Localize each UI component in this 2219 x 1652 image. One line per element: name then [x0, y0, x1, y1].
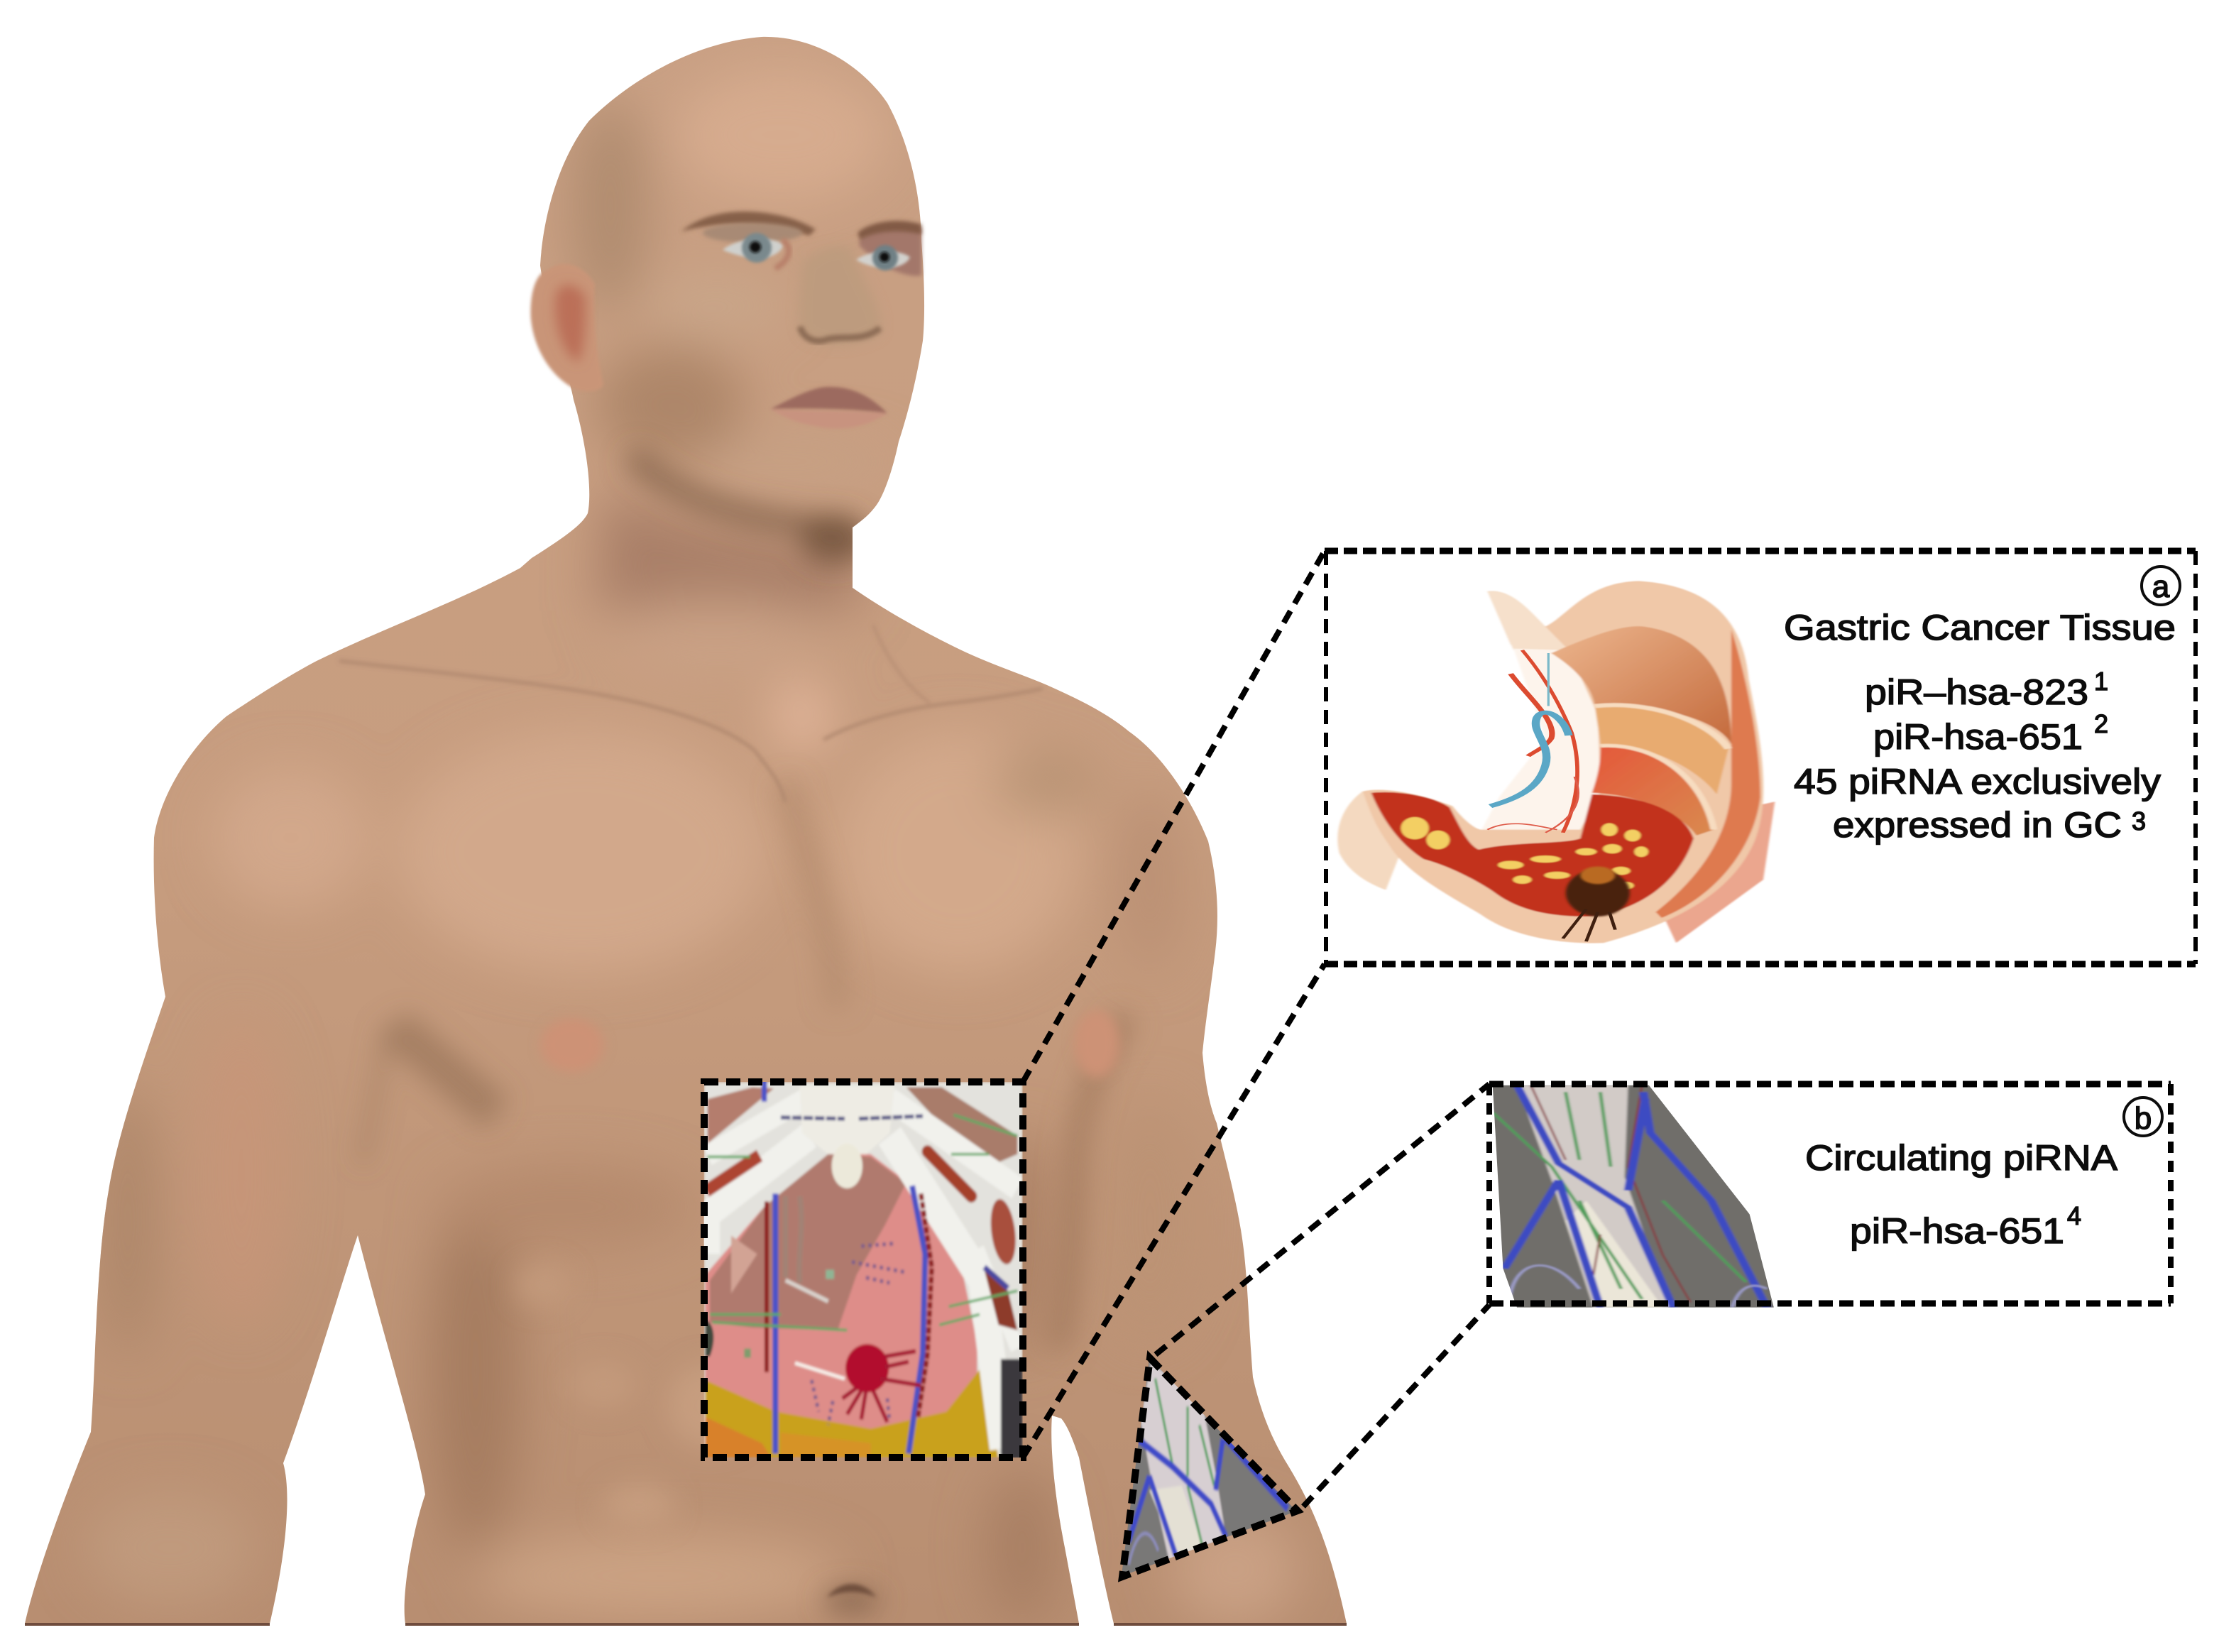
- panel a list: piR-hsa-651: [1873, 717, 2083, 757]
- left brow and eye: [681, 212, 816, 268]
- stomach illustration: [1337, 581, 1775, 943]
- stomach tumour: [1563, 866, 1630, 941]
- panel a: gastric cancer tissue: [1325, 551, 2196, 964]
- panel a list: piR–hsa-823: [1865, 672, 2088, 712]
- panel a list: 3: [2132, 806, 2146, 836]
- tumour: [843, 1344, 921, 1422]
- nipple: right: [1074, 1010, 1119, 1078]
- ear: [531, 264, 603, 391]
- panel b list: 4: [2067, 1201, 2081, 1230]
- connector lines: forearm inset to panel b: [1156, 1084, 1489, 1506]
- panel b list: piR-hsa-651: [1850, 1211, 2064, 1251]
- human torso and head figure: [25, 37, 1347, 1626]
- dashed border: [704, 1082, 1023, 1457]
- nipple: left: [540, 1018, 604, 1072]
- panel b border: [1489, 1084, 2171, 1303]
- connector lines: chest inset to panel a: [1023, 551, 1325, 1457]
- dashed border: [1122, 1358, 1298, 1577]
- lips: [771, 387, 887, 429]
- stomach vessels: [1487, 650, 1578, 833]
- inset on chest: abdominal anatomy with stomach tumour: [704, 1078, 1023, 1459]
- panel b label: [2124, 1098, 2162, 1136]
- panel b label: b: [2135, 1101, 2152, 1136]
- panel a list: 45 piRNA exclusively: [1794, 762, 2161, 802]
- panel b: circulating piRNA: [1482, 1082, 2171, 1313]
- nose: [799, 246, 881, 345]
- panel a list: [1794, 667, 2161, 845]
- panel a heading: Gastric Cancer Tissue: [1784, 608, 2176, 647]
- panel b list: [1850, 1201, 2081, 1251]
- face features: [681, 212, 921, 429]
- anatomy picture: [704, 1078, 1023, 1459]
- collarbone lines: [339, 625, 1043, 802]
- panel a list: 2: [2094, 709, 2108, 738]
- panel a border: [1325, 551, 2196, 964]
- inset on forearm: vessels triangle: [1114, 1351, 1303, 1583]
- navel: [827, 1584, 877, 1597]
- body shading: [85, 67, 1299, 1626]
- panel a label: [2142, 567, 2180, 605]
- vessel picture: [1122, 1362, 1292, 1573]
- bottom edge line: [25, 1623, 1347, 1626]
- vessel picture: [1482, 1082, 1781, 1313]
- panel b heading: Circulating piRNA: [1805, 1138, 2118, 1178]
- right brow and eye: [856, 221, 921, 276]
- panel a label: a: [2152, 569, 2170, 604]
- panel a list: expressed in GC: [1833, 805, 2122, 845]
- panel a list: 1: [2094, 667, 2108, 696]
- body silhouette: [25, 37, 1347, 1624]
